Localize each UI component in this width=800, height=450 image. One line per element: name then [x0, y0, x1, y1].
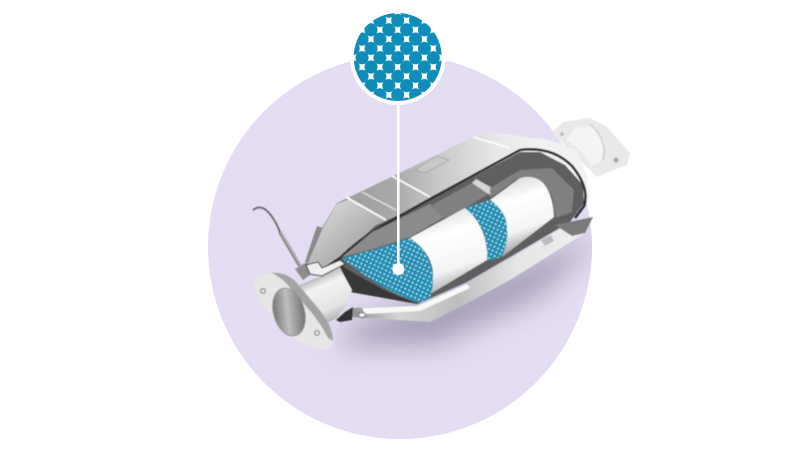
rear catalyst face: [465, 200, 507, 260]
front catalyst face: [342, 238, 433, 302]
magnified catalyst lens: [350, 9, 446, 106]
light wedge above front catalyst: [342, 204, 446, 257]
front cylinder: [410, 208, 487, 302]
inlet pipe: [295, 268, 352, 333]
upper shell: [305, 132, 590, 270]
side strip beside cone: [305, 226, 323, 262]
inlet flange: [254, 273, 333, 349]
callout anchor dot: [392, 263, 404, 275]
lower shell: [336, 217, 593, 322]
catalytic converter: [253, 118, 630, 349]
ground shadow: [335, 235, 600, 345]
shell ribs: [346, 137, 510, 220]
callout leader line: [397, 100, 400, 270]
rear cylinder: [490, 177, 554, 257]
background lilac circle: [208, 55, 592, 439]
cone lip: [306, 260, 345, 276]
oxygen sensor: [253, 208, 314, 280]
right outlet flange: [552, 118, 630, 177]
cut-away interior: [322, 149, 586, 304]
